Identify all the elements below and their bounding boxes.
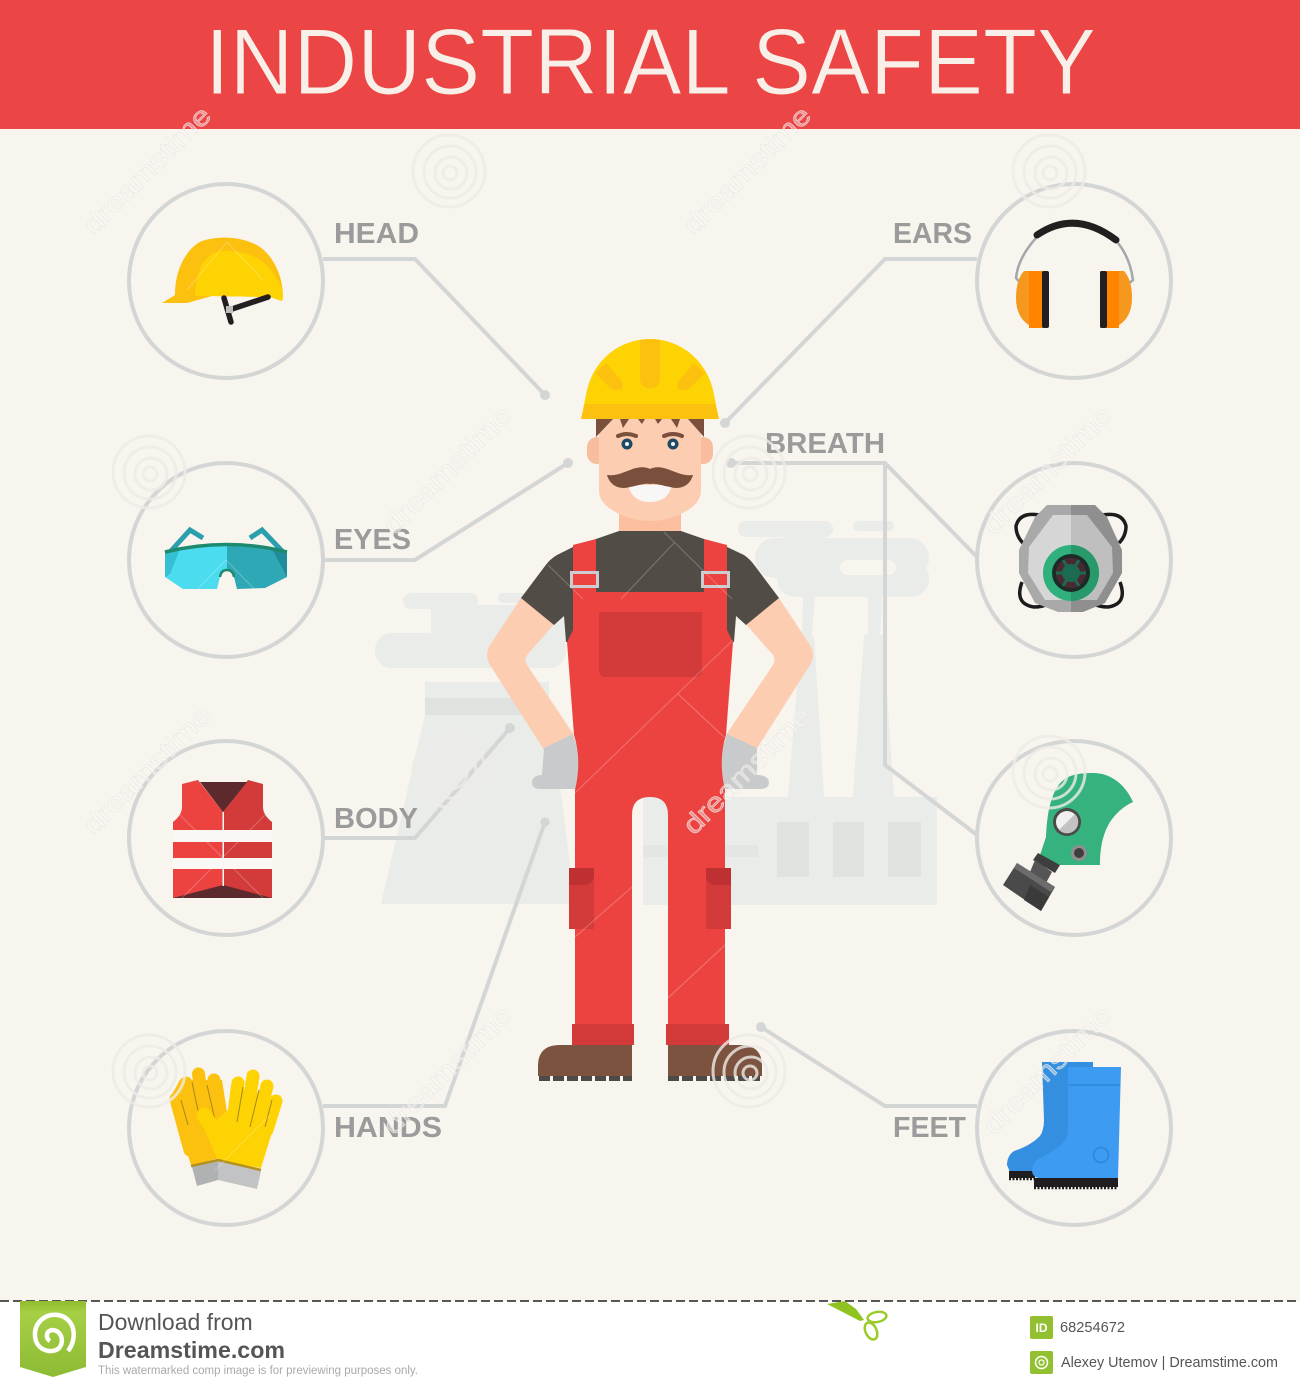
middle building [643,797,759,905]
label: head: HEAD [334,218,419,250]
watermark text: dreamstime [677,700,817,840]
text: download from: Download from [98,1309,253,1335]
worker shirt [521,531,779,642]
right building [758,797,937,905]
watermark text: dreamstime [977,400,1117,540]
ears [587,437,713,464]
icon: download ribbon [20,1301,86,1377]
face [599,419,701,521]
factory background illustration [375,521,937,905]
label: feet: FEET [893,1112,966,1144]
smile [628,485,672,502]
left glove [170,1074,227,1186]
text: watermark notice: This watermarked comp image is for previewing purposes only. [98,1365,418,1377]
worker neck [619,505,681,535]
icon: gas mask [1003,773,1133,911]
icon: gloves [170,1074,282,1189]
worker figure [487,339,813,1078]
icon: vest [173,780,272,898]
watermark text: dreamstime [977,1000,1117,1140]
worker arms [487,598,813,750]
watermark spirals [113,135,1085,1107]
eyebrows [618,434,682,436]
text: image id: 68254672 [1060,1320,1125,1336]
watermark hairlines [180,242,733,1170]
icon: respirator [1016,505,1126,612]
icon: goggles [165,530,287,589]
watermark text [77,100,1117,1140]
icon: id badge: ID [1036,1321,1048,1335]
label: ears: EARS [893,218,972,250]
line: ears [725,259,977,423]
icon: id badge [1030,1316,1053,1339]
text: dreamstime.com: Dreamstime.com [98,1337,285,1363]
trouser cuffs [572,1024,729,1045]
title: INDUSTRIAL SAFETY [205,9,1096,114]
left smoke [375,593,566,668]
eyes [622,438,678,450]
watermark text: dreamstime [377,1000,517,1140]
line: head [323,259,545,395]
hair [596,419,704,437]
line: eyes [323,463,568,560]
label: hands: HANDS [334,1112,442,1144]
icon: ear muffs [1016,223,1133,328]
worker gloves [532,734,769,789]
strap buckles [572,572,728,586]
watermark text: dreamstime [677,100,817,240]
worker overalls [567,539,733,1026]
header banner [0,0,1300,129]
watermark text: dreamstime [377,400,517,540]
icon: boots [1007,1062,1121,1188]
knee pads [569,868,731,929]
watermark text: dreamstime [77,700,217,840]
right smoke [738,521,929,640]
mustache [607,467,693,488]
bib pocket [599,612,702,677]
chimneys [788,637,824,797]
line: body [323,728,510,838]
line: breath [731,463,977,835]
windows [777,822,921,877]
line: hands [323,822,545,1106]
icon circles [129,184,1171,1225]
footer [0,1301,1300,1390]
right glove [191,1076,282,1189]
left cooling tower [381,682,575,904]
text: author credit: Alexey Utemov | Dreamstime.com [1061,1355,1278,1371]
watermark text: dreamstime [77,100,217,240]
connector lines [323,259,977,1106]
icon: helmet [162,238,283,322]
label: eyes: EYES [334,524,411,556]
hard hat [581,339,719,419]
boots [538,1045,762,1076]
label: breath: BREATH [765,428,885,460]
icon: copyright badge [1030,1351,1053,1374]
label: body: BODY [334,803,418,835]
line: feet [761,1027,977,1106]
labels [334,218,972,1144]
icon: scissors [827,1301,887,1341]
connector dots [505,390,766,1032]
boot soles [539,1076,760,1081]
